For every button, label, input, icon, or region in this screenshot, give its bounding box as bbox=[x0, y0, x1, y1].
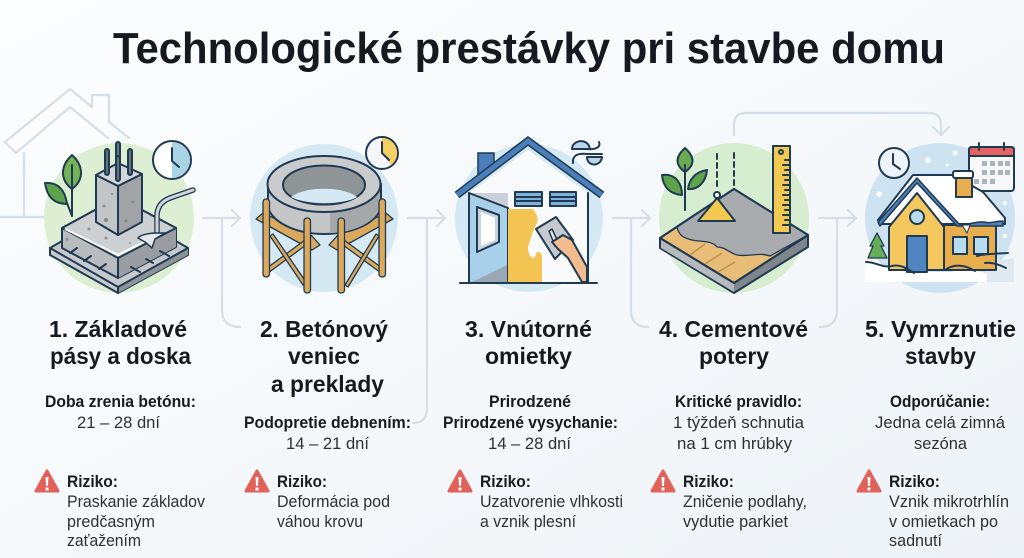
trowel and hand bbox=[536, 217, 573, 259]
step 3 risk: Riziko: bbox=[480, 472, 531, 491]
step 1 risk bbox=[36, 471, 205, 550]
icon: cement screed bbox=[659, 143, 809, 293]
cement bbox=[677, 189, 808, 256]
snow drip bbox=[962, 225, 970, 233]
warning icon bbox=[246, 471, 268, 491]
hose bbox=[157, 190, 193, 233]
step 5 recommendation: sezóna bbox=[914, 434, 968, 453]
leaves bbox=[63, 155, 81, 189]
ruler bbox=[773, 146, 790, 233]
step 4 risk: Riziko: bbox=[683, 472, 734, 491]
icon: foundation bbox=[44, 141, 194, 293]
arrow: step 2 to step 3 bbox=[408, 210, 445, 423]
snow drifts bbox=[866, 253, 1008, 273]
step 5 heading bbox=[865, 316, 1016, 369]
icon: house with plaster bbox=[455, 141, 603, 292]
step 2 risk: váhou krovu bbox=[277, 512, 363, 531]
step 1 risk: Riziko: bbox=[67, 472, 118, 491]
step 4 risk: vydutie parkiet bbox=[683, 512, 788, 531]
step 3 risk: a vznik plesní bbox=[480, 512, 576, 531]
step 5 recommendation: Jedna celá zimná bbox=[875, 413, 1006, 432]
step 2 risk: Riziko: bbox=[277, 472, 327, 491]
step 4 rule: 1 týždeň schnutia bbox=[673, 413, 805, 432]
step 1 duration bbox=[45, 392, 196, 432]
step 1 risk: zaťažením bbox=[67, 531, 141, 550]
arrow: top bypass to step 5 bbox=[734, 113, 949, 135]
icon: concrete ring beam bbox=[250, 137, 398, 293]
step 2 duration bbox=[244, 413, 411, 453]
scaffold bbox=[263, 199, 386, 293]
step 1 heading: pásy a doska bbox=[50, 343, 192, 369]
step 5 risk: Vznik mikrotrhlín bbox=[889, 492, 1009, 511]
step 4 risk: Zničenie podlahy, bbox=[683, 492, 807, 511]
wing bbox=[944, 225, 996, 270]
step 4 rule: Kritické pravidlo: bbox=[675, 392, 802, 411]
arrow: step 1 to step 2 bbox=[203, 210, 240, 327]
plaster patch bbox=[508, 209, 542, 283]
step 3 risk: Uzatvorenie vlhkosti bbox=[480, 492, 623, 511]
slab bbox=[660, 235, 808, 293]
step 2 heading bbox=[260, 316, 388, 397]
step 5 heading: stavby bbox=[905, 343, 976, 369]
step 4 heading: 4. Cementové bbox=[659, 316, 808, 342]
calendar bbox=[969, 147, 1014, 191]
column bbox=[96, 175, 118, 235]
step 2 duration: 14 – 21 dní bbox=[286, 434, 369, 453]
step 1 heading: 1. Základové bbox=[49, 316, 187, 342]
vents bbox=[515, 192, 576, 206]
roof with snow bbox=[878, 175, 1005, 224]
plant bbox=[678, 148, 692, 172]
step 5 risk: sadnutí bbox=[889, 531, 942, 550]
title: Technologické prestávky pri stavbe domu bbox=[113, 24, 945, 73]
step 1 duration: Doba zrenia betónu: bbox=[45, 392, 196, 411]
warning icon bbox=[449, 471, 471, 491]
step 2 heading: a preklady bbox=[271, 371, 384, 397]
step 3 risk bbox=[449, 471, 623, 531]
warning icon bbox=[652, 471, 674, 491]
ground snow bbox=[985, 258, 1014, 282]
warning icon bbox=[858, 471, 880, 491]
flakes bbox=[876, 150, 1007, 238]
step 5 risk bbox=[858, 471, 1009, 550]
interior walls bbox=[469, 150, 588, 283]
step 5 recommendation: Odporúčanie: bbox=[890, 392, 990, 411]
rebars bbox=[105, 142, 132, 181]
step 3 duration bbox=[443, 392, 618, 453]
clock bbox=[153, 141, 191, 179]
step 1 risk: predčasným bbox=[67, 512, 155, 531]
step 4 heading: potery bbox=[699, 343, 769, 369]
step 1 heading bbox=[49, 316, 192, 369]
step 3 heading: 3. Vnútorné bbox=[465, 316, 592, 342]
step 3 duration: Prirodzené vysychanie: bbox=[443, 413, 618, 432]
step 5 heading: 5. Vymrznutie bbox=[865, 316, 1016, 342]
chimney bbox=[956, 177, 972, 197]
step 2 heading: veniec bbox=[288, 343, 360, 369]
clock bbox=[366, 137, 398, 169]
footing block bbox=[62, 210, 176, 278]
step 1 risk: Praskanie základov bbox=[67, 492, 205, 511]
outer walls and roof bbox=[460, 193, 597, 283]
scaffold back beams bbox=[256, 213, 393, 250]
step 4 risk bbox=[652, 471, 807, 531]
step 2 duration: Podopretie debnením: bbox=[244, 413, 411, 432]
step 3 heading bbox=[465, 316, 592, 369]
gable wall bbox=[889, 193, 944, 270]
step 2 heading: 2. Betónový bbox=[260, 316, 388, 342]
step 2 risk bbox=[246, 471, 390, 531]
step 1 duration: 21 – 28 dní bbox=[77, 413, 160, 432]
step 2 risk: Deformácia pod bbox=[277, 492, 390, 511]
clock bbox=[879, 148, 909, 178]
arrow: step 4 to step 5 bbox=[819, 210, 856, 327]
step 4 rule bbox=[673, 392, 805, 453]
step 3 heading: omietky bbox=[485, 343, 572, 369]
arrow: step 3 to step 4 bbox=[613, 210, 650, 327]
tree bbox=[868, 233, 887, 258]
warning icon bbox=[36, 471, 58, 491]
step 3 duration: Prirodzené bbox=[489, 392, 571, 411]
base plate bbox=[50, 208, 188, 293]
step 4 heading bbox=[659, 316, 808, 369]
background house outline bbox=[0, 89, 129, 217]
step 4 rule: na 1 cm hrúbky bbox=[677, 434, 792, 453]
plumb triangle bbox=[698, 198, 735, 221]
step 3 duration: 14 – 28 dní bbox=[488, 434, 571, 453]
ring bbox=[268, 184, 381, 234]
icon: winter house bbox=[865, 143, 1015, 293]
step 5 risk: Riziko: bbox=[889, 472, 940, 491]
wind bbox=[572, 141, 602, 164]
window bbox=[477, 207, 499, 252]
step 5 risk: v omietkach po bbox=[889, 512, 998, 531]
step 5 recommendation bbox=[875, 392, 1006, 453]
